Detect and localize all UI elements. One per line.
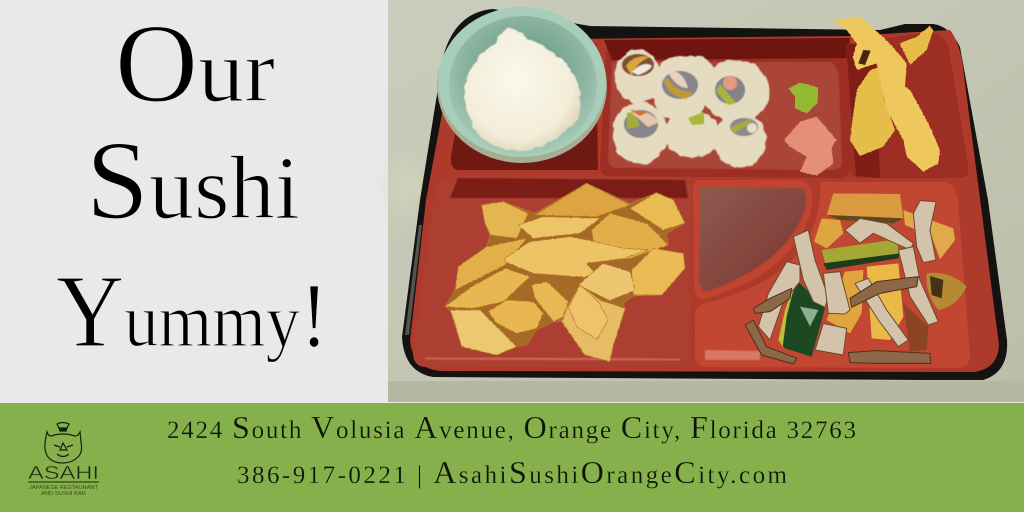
logo: Asahi Japanese Restaurant and Sushi Bar bbox=[28, 422, 99, 497]
pickled ginger bbox=[784, 117, 837, 176]
second shrimp bbox=[850, 26, 933, 156]
title: Our Sushi Yummy!: Yummy! bbox=[56, 254, 328, 369]
title: Our Sushi Yummy!: Our bbox=[115, 2, 275, 126]
footer band bbox=[0, 403, 1024, 512]
steamed rice bbox=[465, 27, 581, 151]
counter surface bbox=[388, 0, 1024, 402]
logo wordmark: ASAHI bbox=[28, 463, 99, 483]
panel: title background bbox=[0, 0, 388, 402]
compartment: sauce bbox=[693, 180, 812, 299]
wasabi, ginger and shrimp tempura bbox=[784, 17, 940, 176]
title: Our Sushi Yummy! bbox=[56, 2, 328, 369]
zucchini bbox=[822, 239, 899, 268]
logo tagline 1: JAPANESE RESTAURANT bbox=[29, 485, 99, 491]
tofu and squash bbox=[827, 193, 903, 218]
wasabi bbox=[788, 83, 818, 113]
compartment: rice bbox=[451, 44, 598, 170]
stir-fried vegetables bbox=[745, 193, 967, 364]
icon: cat face with sushi on head bbox=[45, 422, 82, 463]
chicken pieces bbox=[445, 183, 685, 362]
phone and website: 386-917-0221 | AsahiSushiOrangeCity.com bbox=[237, 454, 788, 490]
compartment: shrimp bbox=[846, 32, 968, 178]
photo: bento tray on counter bbox=[387, 0, 1024, 402]
onions bbox=[758, 201, 938, 355]
first shrimp bbox=[833, 17, 940, 172]
tray bbox=[402, 9, 1007, 380]
sushi rolls bbox=[612, 49, 770, 168]
title: Our Sushi Yummy!: Sushi bbox=[86, 119, 300, 243]
compartment: sushi bbox=[600, 40, 850, 178]
address: 2424 South Volusia Avenue, Orange City, Florida 32763 bbox=[167, 409, 856, 445]
compartment: chicken bbox=[413, 175, 691, 367]
compartment: vegetables bbox=[695, 182, 970, 368]
rice bowl bbox=[437, 7, 607, 163]
logo tagline 2: AND SUSHI BAR bbox=[41, 491, 86, 497]
